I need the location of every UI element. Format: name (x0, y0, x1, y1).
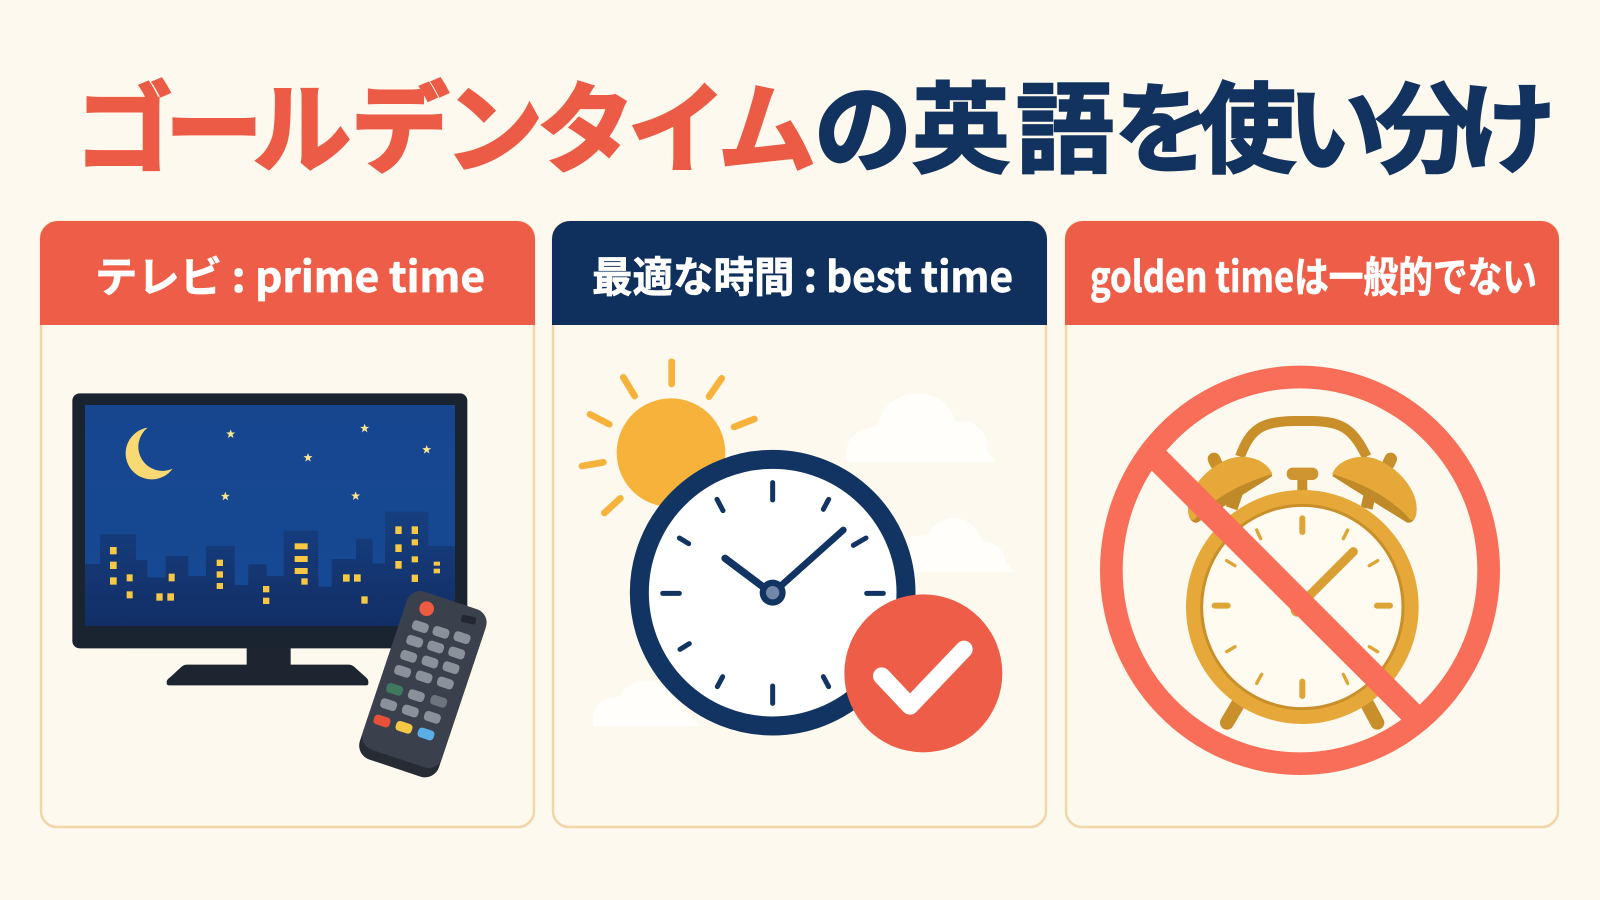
alarm clock (1188, 421, 1417, 723)
clock ticks (663, 483, 883, 703)
clock ring (1194, 498, 1411, 716)
clock (639, 459, 906, 726)
panel: prime time (40, 221, 535, 827)
panel frame (553, 222, 1046, 827)
panel frame (1066, 222, 1558, 827)
stars (221, 424, 431, 500)
colour buttons (373, 682, 435, 741)
clock hands (725, 530, 843, 588)
title: coral part: ゴールデンタイム (75, 51, 816, 193)
handle (1240, 421, 1367, 457)
illustration: crossed out alarm clock (1100, 366, 1500, 775)
lit windows (110, 526, 440, 604)
title (75, 51, 1556, 193)
tv screen (85, 405, 455, 626)
panel heading: 最適な時間 : best time (592, 244, 1013, 305)
sensor (461, 615, 477, 625)
clouds (593, 393, 1015, 726)
clock hub (760, 580, 786, 606)
left bell (1188, 457, 1272, 523)
panel frame (41, 222, 534, 827)
illustration: clock with sun and check (582, 362, 1015, 752)
panel header (552, 221, 1047, 325)
moon (126, 428, 173, 479)
top knob (1297, 477, 1307, 493)
check badge (844, 594, 1002, 752)
illustration: tv and remote (72, 393, 490, 781)
right bell (1332, 457, 1417, 523)
power button (419, 601, 434, 616)
clock ticks (1215, 518, 1390, 696)
panel header (1065, 221, 1559, 325)
bell stems (1232, 493, 1370, 508)
legs (1227, 702, 1377, 723)
grey buttons (379, 619, 471, 725)
panel heading: テレビ : prime time (95, 244, 485, 305)
panel header (40, 221, 535, 325)
title: navy part: の英語を使い分け (814, 51, 1556, 193)
tv stand (167, 645, 368, 685)
prohibition sign (1100, 366, 1500, 775)
remote body (355, 587, 490, 781)
city skyline (85, 512, 455, 626)
remote control (355, 587, 490, 781)
sun (582, 362, 754, 513)
tv body (72, 393, 467, 648)
clock hands (1300, 552, 1353, 605)
panel: golden time (1065, 221, 1559, 827)
panel: best time (552, 221, 1047, 827)
